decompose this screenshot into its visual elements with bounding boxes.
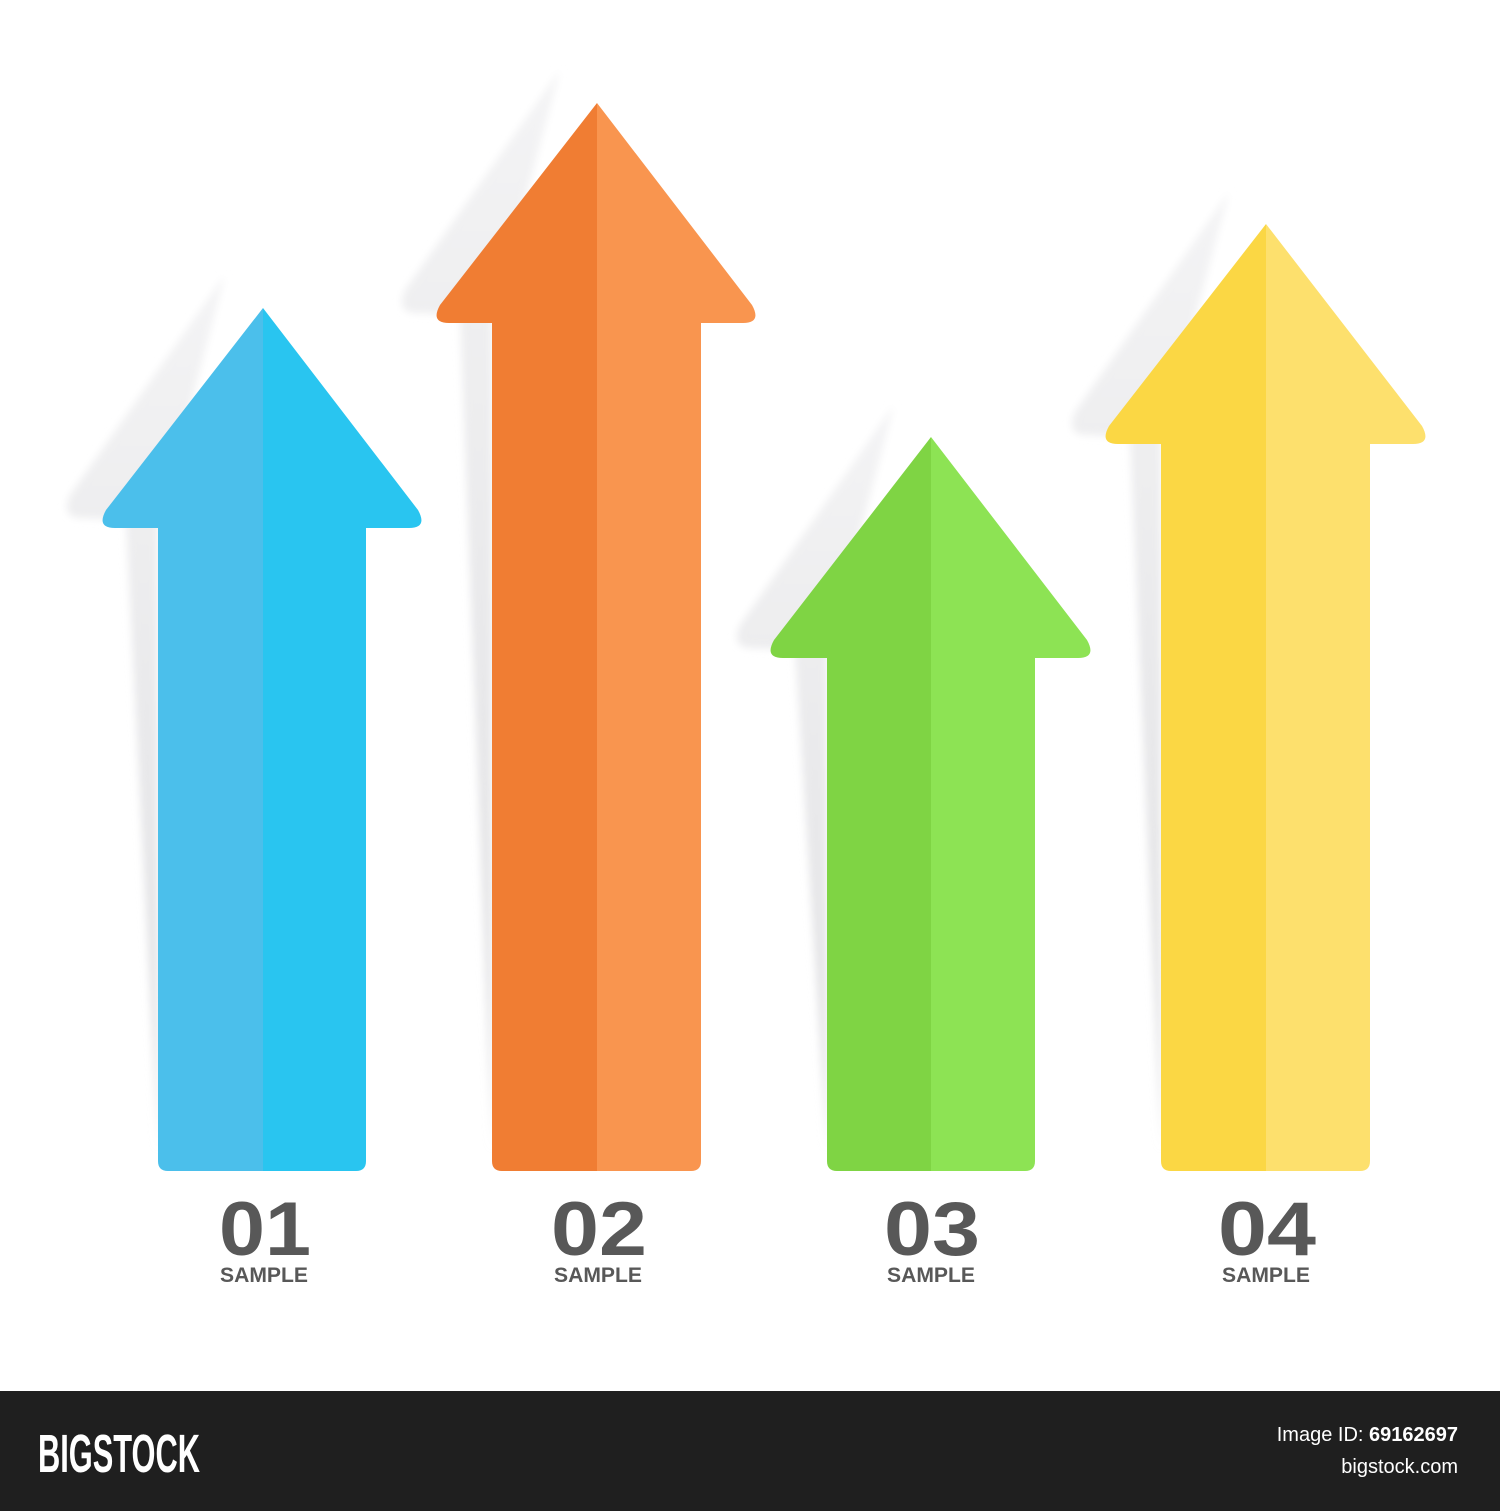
arrow 03 green [737, 405, 1090, 1171]
label 04: 04 [1218, 1187, 1316, 1272]
arrow 04 yellow [1072, 192, 1425, 1171]
footer bar: bigstock.com [1341, 1456, 1458, 1478]
label 01: SAMPLE [220, 1264, 308, 1287]
label 02: 02 [551, 1187, 647, 1272]
label 02: SAMPLE [554, 1264, 642, 1287]
arrow 02 orange [402, 70, 755, 1171]
label 04: SAMPLE [1222, 1264, 1310, 1287]
label 03: 03 [884, 1187, 980, 1272]
footer bar: Image ID: 69162697 [1277, 1424, 1458, 1446]
footer bar [0, 1391, 1500, 1511]
arrow 01 blue [67, 275, 421, 1171]
label 01: 01 [219, 1187, 311, 1272]
label 03: SAMPLE [887, 1264, 975, 1287]
footer bar: BIGSTOCK [38, 1424, 200, 1484]
